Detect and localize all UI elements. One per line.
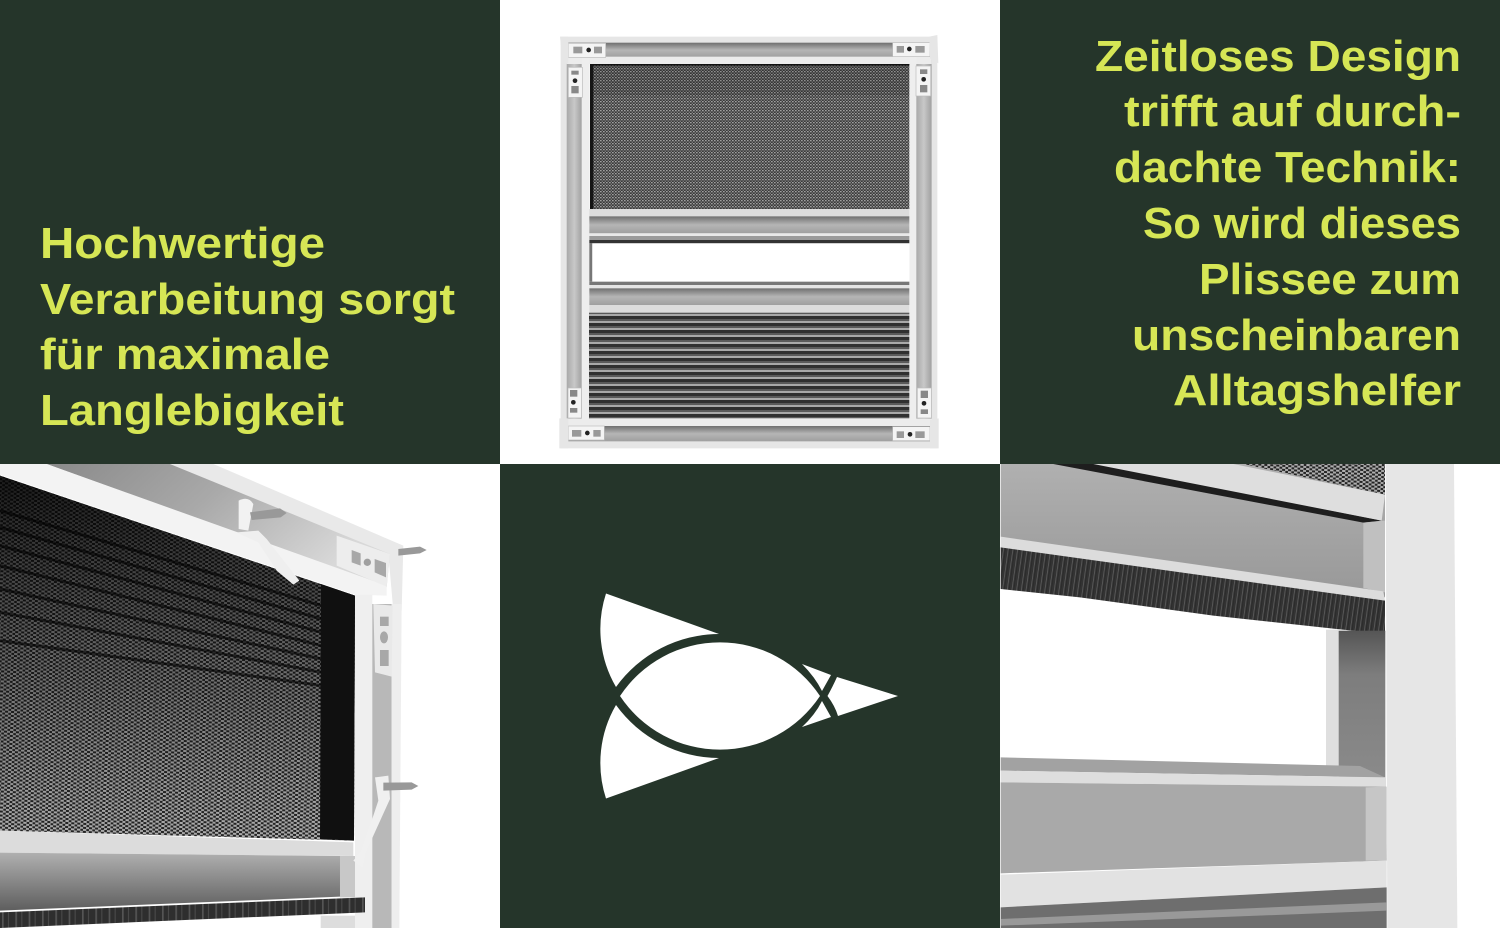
- pleat bottom: [1001, 887, 1387, 928]
- middle rails and opening: [589, 209, 909, 313]
- heading: Zeitloses Design: trifft auf durch-: [1124, 87, 1461, 136]
- clip holes: [570, 46, 928, 438]
- right stile: [355, 595, 402, 928]
- panel: top left heading block: [0, 0, 500, 464]
- heading: Hochwertige Verarbeitung: [40, 219, 455, 435]
- hook and pin lower: [353, 776, 418, 867]
- upper mesh screen: [590, 64, 909, 209]
- outer frame: [561, 37, 937, 448]
- panel: product detail photo left corner: [0, 464, 427, 928]
- heading: Hochwertige Verarbeitung: Langlebigkeit: [40, 386, 344, 435]
- heading: Hochwertige Verarbeitung: Hochwertige: [40, 219, 325, 268]
- lower pleated blind: [589, 313, 909, 418]
- inner side post upper: [1363, 521, 1385, 592]
- front white rail: [0, 464, 387, 596]
- mesh top strip: [1243, 464, 1385, 495]
- heading: Zeitloses Design: Zeitloses Design: [1095, 32, 1461, 81]
- corner clips: [559, 35, 939, 448]
- top clip: [337, 536, 390, 587]
- panel: top right heading block: [1000, 0, 1500, 464]
- grey lower band: [1001, 782, 1387, 873]
- hook and pin top: [237, 499, 299, 585]
- panel: product photo front view: [559, 35, 939, 448]
- right stile: [1386, 464, 1457, 928]
- mesh screen: [0, 476, 355, 841]
- grey upper band: [1001, 464, 1385, 597]
- bottom rail and lower section: [0, 831, 365, 928]
- outer top rail: [170, 464, 403, 611]
- panel: product detail photo right rail: [1001, 464, 1457, 928]
- shadow and upper white rail: [1053, 464, 1385, 523]
- heading: Zeitloses Design: So wird dieses: [1143, 199, 1461, 248]
- heading: Zeitloses Design: Plissee zum: [1199, 255, 1461, 304]
- brush seal: [1001, 547, 1385, 634]
- heading: Zeitloses Design: unscheinbaren: [1132, 311, 1461, 360]
- panel: bottom centre logo block: [500, 464, 1000, 928]
- grey frame band: [47, 464, 390, 587]
- heading: Zeitloses Design: dachte Technik:: [1114, 143, 1461, 192]
- heading: Zeitloses Design: Alltagshelfer: [1173, 366, 1461, 415]
- lower sill: [1001, 757, 1386, 787]
- icon: white fish and triangle logo: [600, 594, 898, 798]
- side clip: [373, 604, 393, 677]
- window post: [1326, 630, 1385, 777]
- heading: Zeitloses Design: [1095, 32, 1461, 415]
- pin top right: [398, 547, 427, 556]
- heading: Hochwertige Verarbeitung: Verarbeitung sorgt: [40, 275, 455, 324]
- lower white rail: [1001, 861, 1387, 907]
- light strip: [1001, 537, 1385, 601]
- heading: Hochwertige Verarbeitung: für maximale: [40, 330, 330, 379]
